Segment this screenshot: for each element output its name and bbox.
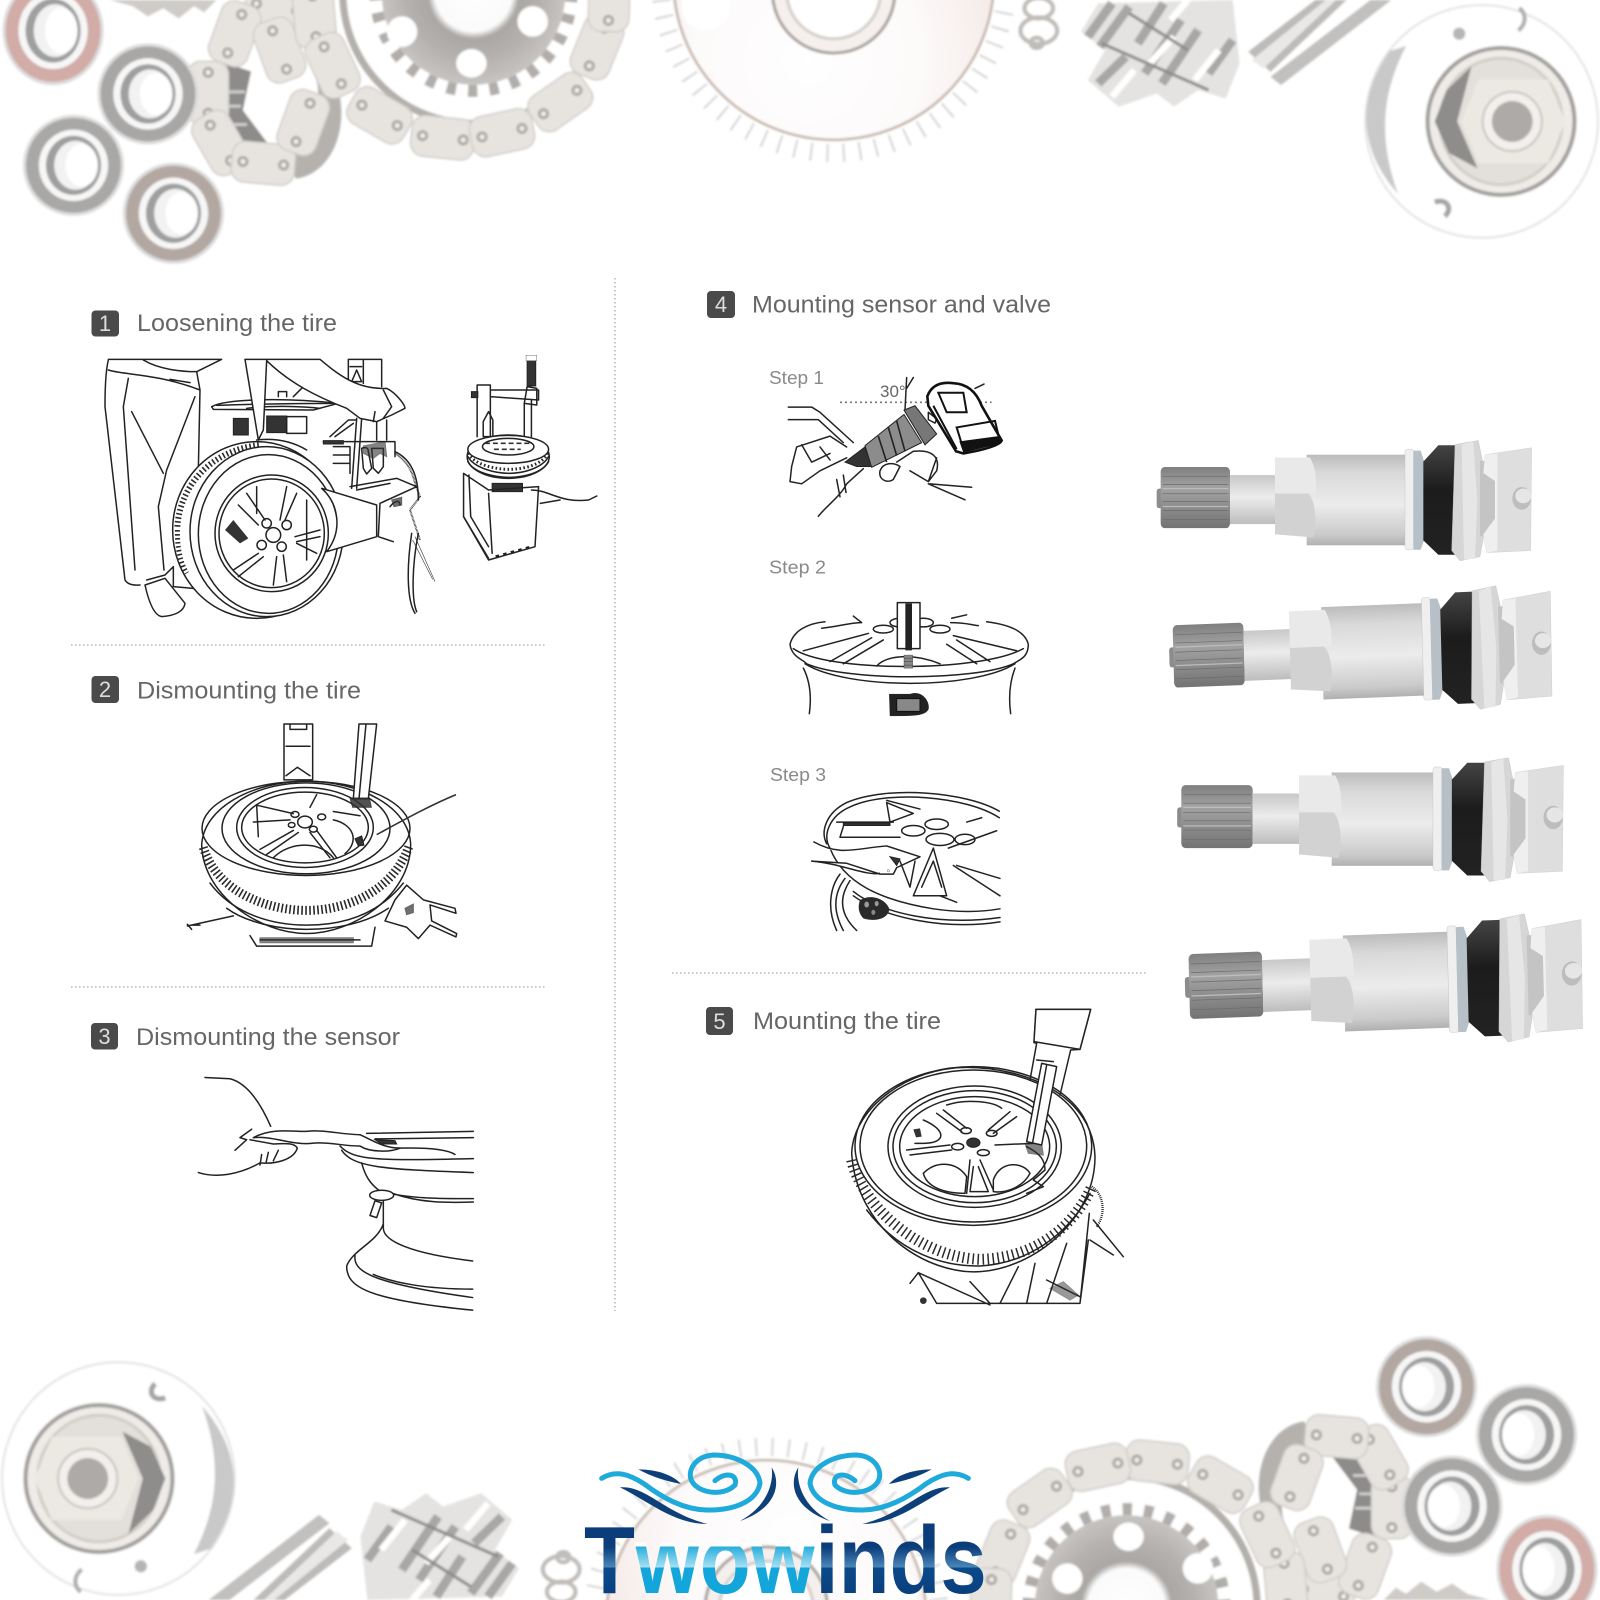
heading 1: 1 [99, 311, 111, 336]
gear shafts [1081, 0, 1240, 107]
valve 4 [1184, 912, 1584, 1054]
bearing: brown grey [124, 164, 222, 262]
heading 5: Mounting the tire [753, 1008, 941, 1035]
chain loop left [187, 0, 365, 186]
heading 4: 4 [715, 292, 727, 317]
small chain teeth [110, 0, 216, 18]
rods [1248, 0, 1391, 85]
panel 1: loosening the tire [92, 310, 597, 618]
illustration: step 2 [790, 603, 1028, 716]
step 2 label: Step 2 [769, 558, 826, 578]
step 1 label: Step 1 [769, 368, 824, 388]
divider: vertical [614, 278, 616, 1311]
heading 4: Mounting sensor and valve [752, 292, 1051, 318]
step 3 label: Step 3 [770, 765, 826, 785]
valve 2 [1168, 584, 1553, 721]
heading 1: Loosening the tire [137, 310, 337, 337]
heading 3: Dismounting the sensor [136, 1024, 400, 1051]
panel 3: dismounting the sensor [91, 1023, 473, 1310]
valve 1 [1157, 440, 1532, 561]
bearing: grey 1 [99, 45, 197, 143]
background: machine parts bottom [2, 1338, 1596, 1600]
logo emblem: swirls [602, 1455, 968, 1524]
small chain piece [1020, 0, 1057, 48]
panel 2: dismounting the tire [92, 676, 457, 946]
panel 4: mounting sensor and valve [707, 291, 1051, 931]
panel 5: mounting the tire [706, 1007, 1123, 1305]
illustration: small tire changer [464, 355, 597, 560]
heading 2: 2 [99, 677, 111, 702]
illustration: tire on changer [187, 724, 457, 946]
bearing: grey 2 [24, 116, 122, 214]
background: machine parts top [4, 0, 1598, 262]
illustration: step 3 [812, 793, 1000, 931]
chain ring and sprocket [342, 0, 631, 161]
illustration: hand with lever on rim [198, 1077, 473, 1310]
step 1 angle label: 30° [880, 382, 906, 401]
illustration: person and tire changer [105, 359, 435, 618]
heading 5: 5 [713, 1009, 726, 1034]
illustration: tire on changer with tool [852, 1009, 1123, 1305]
heading 2: Dismounting the tire [137, 678, 361, 704]
flange with bearing [1365, 5, 1598, 238]
product photo: four valve stems [1157, 440, 1584, 1054]
bearing: red [4, 0, 102, 84]
large gear [660, 0, 1007, 153]
illustration: step 1 [788, 378, 1002, 516]
valve 3 [1177, 758, 1563, 882]
heading 3: 3 [98, 1024, 111, 1049]
